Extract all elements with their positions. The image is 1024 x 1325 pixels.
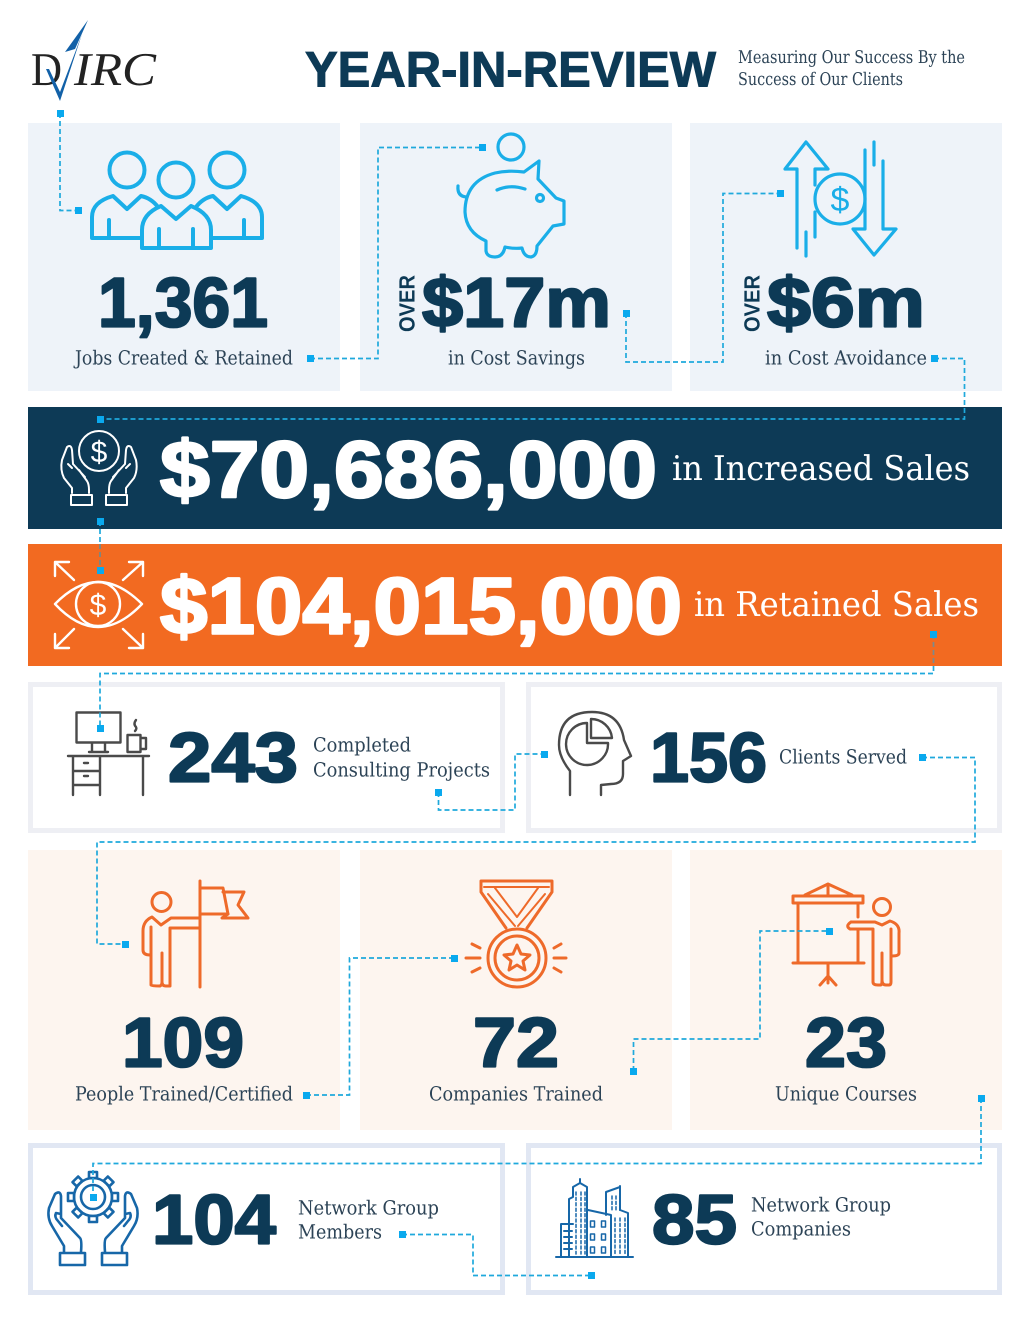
stat: 243: 243	[168, 718, 298, 796]
stat: 1,361: 1,361	[98, 264, 268, 342]
over label: OVER	[394, 275, 420, 332]
stat: $104,015,000: $104,015,000	[160, 562, 682, 650]
label: network group members	[298, 1196, 439, 1244]
icon: desk with computer	[68, 712, 149, 795]
icon: money arrows	[785, 142, 896, 256]
panel: network group members	[30, 1146, 502, 1292]
icon: hands with coin	[61, 431, 137, 505]
stat: 23: 23	[805, 1004, 887, 1082]
panel: retained sales	[28, 544, 1002, 666]
label: consulting projects	[313, 734, 490, 782]
label: increased sales: in Increased Sales	[672, 449, 970, 489]
panel: companies trained	[360, 850, 672, 1130]
label: consulting projects: Completed	[313, 734, 411, 756]
label: consulting projects: Consulting Projects	[313, 758, 490, 782]
logo: DVIRC: IRC	[73, 44, 157, 96]
label: clients served: Clients Served	[779, 746, 907, 768]
icon: hands with coin: $	[91, 436, 108, 469]
icon: piggy bank	[458, 134, 564, 257]
panel: unique courses	[690, 850, 1002, 1130]
stat: $17m: $17m	[422, 264, 611, 342]
panel: people trained	[28, 850, 340, 1130]
logo: DVIRC	[31, 20, 157, 101]
icon: city buildings	[556, 1179, 633, 1257]
logo: DVIRC: D	[31, 44, 62, 96]
icon: hands with gear	[48, 1172, 138, 1265]
label: network group companies	[751, 1194, 891, 1240]
label: cost avoidance: in Cost Avoidance	[765, 346, 927, 370]
stat: 156: 156	[650, 718, 767, 796]
over label: OVER	[740, 275, 764, 332]
icon: money arrows: $	[831, 181, 850, 219]
label: retained sales: in Retained Sales	[694, 585, 979, 625]
stat: 72: 72	[473, 1004, 559, 1082]
label: unique courses: Unique Courses	[775, 1082, 917, 1106]
panel: cost avoidance	[690, 123, 1002, 391]
icon: eye with coin	[55, 562, 143, 648]
label: people trained: People Trained/Certified	[75, 1082, 293, 1106]
panel: increased sales	[28, 407, 1002, 529]
stat: $70,686,000: $70,686,000	[160, 425, 657, 514]
stat: 109: 109	[122, 1004, 244, 1082]
panel: network group companies	[528, 1146, 1000, 1292]
subtitle: Success of Our Clients	[738, 70, 903, 90]
icon: person with flag	[143, 881, 248, 987]
panel: clients served	[528, 684, 1000, 830]
stat: $6m: $6m	[767, 264, 925, 342]
subtitle	[738, 48, 965, 90]
stat: 104: 104	[152, 1180, 276, 1258]
connector: dotted path linking all stats	[57, 110, 985, 1279]
icon: head with pie chart	[559, 712, 631, 795]
panel: consulting projects	[30, 684, 502, 830]
label: network group members: Network Group	[298, 1196, 439, 1220]
icon: people	[92, 152, 262, 248]
icon: medal	[466, 881, 566, 987]
label: jobs: Jobs Created & Retained	[73, 346, 293, 370]
label: cost savings: in Cost Savings	[448, 346, 585, 370]
label: network group companies: Companies	[751, 1218, 851, 1240]
panel: cost savings	[360, 123, 672, 391]
icon: eye with coin: $	[90, 589, 107, 622]
label: companies trained: Companies Trained	[429, 1082, 603, 1106]
label: network group companies: Network Group	[751, 1194, 891, 1216]
stat: 85: 85	[652, 1180, 737, 1258]
label: network group members: Members	[298, 1220, 382, 1244]
subtitle: Measuring Our Success By the	[738, 48, 965, 68]
panel: jobs created	[28, 123, 340, 391]
title: YEAR-IN-REVIEW	[305, 42, 717, 98]
icon: presenter with board	[793, 884, 899, 985]
